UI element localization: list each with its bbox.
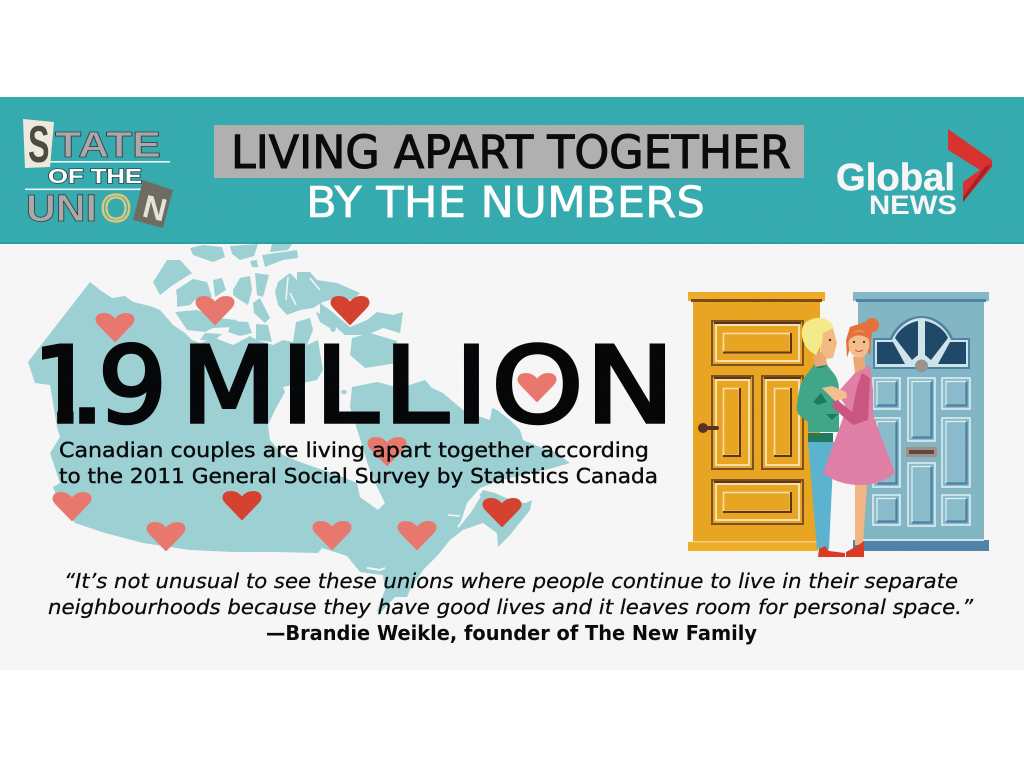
paper grain overlay: [0, 97, 1024, 670]
quote: neighbourhoods because they have good lives and it leaves room for personal space.”: [48, 595, 974, 619]
woman: [822, 318, 895, 557]
door panel top: [712, 321, 803, 365]
big number: 1.9 million: [42, 342, 666, 426]
door panel bottom: [712, 480, 803, 524]
illustration: couple: [797, 318, 895, 557]
heart: Quebec north: [369, 438, 405, 465]
illustration: blue door: [853, 292, 989, 551]
logo: State of the Union: O: [101, 188, 131, 230]
logo: State of the Union: S: [28, 116, 50, 174]
heart: Saskatchewan: [224, 492, 260, 519]
heart: Manitoba: [314, 522, 350, 549]
fanlight window: [873, 316, 970, 372]
quote attribution: —Brandie Weikle, founder of The New Family: [266, 621, 757, 645]
big number: 1.9 million: 1: [27, 325, 100, 447]
header band: [0, 97, 1024, 244]
description text: to the 2011 General Social Survey by Statistics Canada: [59, 464, 658, 488]
logo: State of the Union: TATE: [55, 124, 161, 165]
door handle: [698, 423, 719, 433]
big number: 1.9 million: I: [281, 325, 314, 447]
heart: Nunavut: [332, 297, 368, 324]
logo: State of the Union: [23, 116, 173, 230]
heart: New Brunswick: [484, 499, 520, 526]
big number: 1.9 million: M: [181, 325, 277, 447]
heart: Alberta: [148, 523, 184, 550]
heart: Yukon: [97, 314, 133, 341]
map of Canada: [28, 244, 570, 613]
heart: British Columbia: [54, 493, 90, 520]
logo: State of the Union: OF THE: [48, 166, 142, 188]
door panels: [873, 378, 970, 526]
big number: 1.9 million: L: [384, 326, 449, 448]
logo: Global News: NEWS: [869, 190, 957, 220]
logo: Global News: [836, 129, 992, 220]
logo: State of the Union: UNI: [26, 188, 97, 230]
quote: “It’s not unusual to see these unions where people continue to live in their separate: [64, 569, 958, 593]
big number: 1.9 million: N: [585, 324, 675, 447]
heart: Ontario: [399, 522, 435, 549]
subtitle: By the Numbers: BY THE NUMBERS: [306, 178, 705, 228]
heart: inside the letter O: [519, 374, 555, 401]
illustration: orange door: [688, 292, 825, 551]
big number: 1.9 million: .: [69, 326, 105, 448]
title: Living Apart Together: LIVING APART TOGETHER: [231, 126, 791, 179]
big number: 1.9 million: 9: [98, 326, 167, 448]
man: [797, 318, 845, 557]
door panel middle right: [762, 376, 803, 469]
logo: Global News: Global: [836, 157, 955, 199]
logo: State of the Union: N: [139, 188, 170, 228]
description text: Canadian couples are living apart together according: [59, 438, 649, 462]
title bar: [214, 125, 804, 179]
panel: paper background: [0, 244, 1024, 670]
heart: Northwest Territories: [197, 297, 233, 324]
big number: 1.9 million: L: [315, 325, 378, 447]
quote: [48, 569, 974, 645]
description text: [59, 438, 658, 488]
letterbox: [906, 447, 937, 457]
big number: 1.9 million: I: [455, 325, 488, 447]
big number: 1.9 million: O: [491, 326, 584, 448]
door panel middle left: [712, 376, 753, 469]
